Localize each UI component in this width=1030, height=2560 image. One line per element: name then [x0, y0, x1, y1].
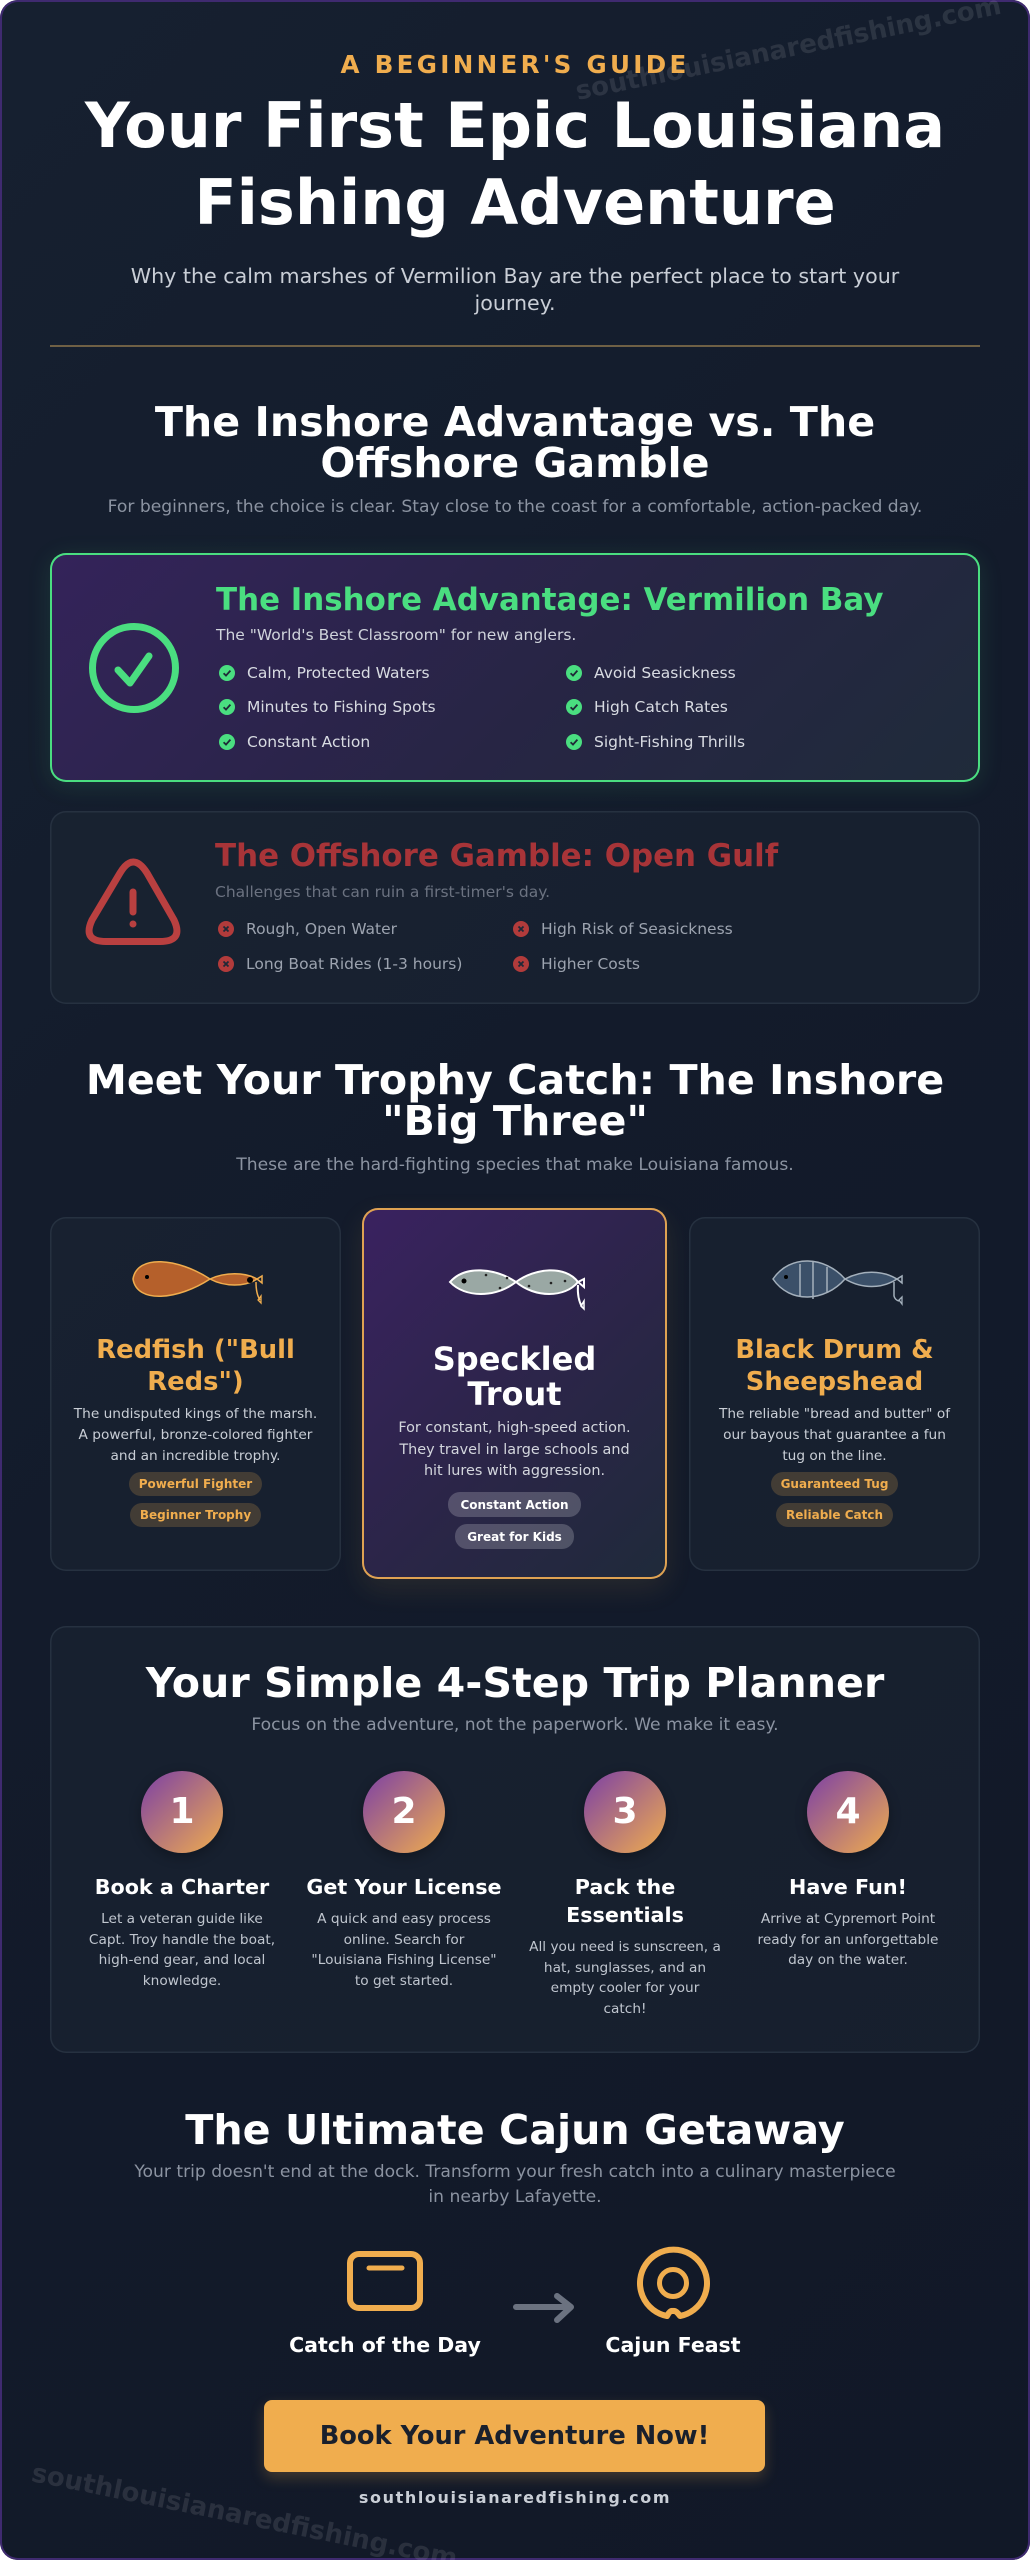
- tag: [771, 1472, 898, 1496]
- step text: empty cooler for your: [551, 1980, 699, 1996]
- description: They travel in large schools and: [399, 1442, 630, 1458]
- header: [50, 50, 980, 347]
- panel: offshore gamble: [50, 811, 980, 1004]
- tag: [448, 1492, 581, 1517]
- number badge: [363, 1771, 445, 1853]
- number badge: 4: [835, 1791, 861, 1832]
- step 1: [89, 1771, 275, 1989]
- heading: Meet Your Trophy Catch: The Inshore: [86, 1056, 944, 1104]
- icon: warning triangle: [86, 858, 180, 945]
- step text: [89, 1911, 275, 1989]
- subtitle: [131, 264, 900, 315]
- step text: Arrive at Cypremort Point: [761, 1911, 935, 1927]
- name: [96, 1335, 295, 1397]
- website: southlouisianaredfishing.com: [359, 2488, 671, 2507]
- description: hit lures with aggression.: [424, 1463, 605, 1479]
- section heading: big three: [86, 1056, 944, 1175]
- number badge: [807, 1771, 889, 1853]
- card: speckled trout (featured): [362, 1208, 667, 1579]
- tag: Beginner Trophy: [140, 1508, 251, 1522]
- step title: Pack the: [575, 1875, 675, 1899]
- heading: Offshore Gamble: [320, 439, 710, 487]
- icon: plate: [635, 2244, 711, 2320]
- icon: speckled trout: [448, 1269, 585, 1311]
- card: redfish: [50, 1217, 341, 1571]
- step text: A quick and easy process: [317, 1911, 491, 1927]
- step title: [566, 1875, 684, 1927]
- step text: All you need is sunscreen, a: [529, 1939, 721, 1955]
- intro text: Focus on the adventure, not the paperwork. We make it easy.: [251, 1715, 779, 1735]
- step text: day on the water.: [788, 1952, 908, 1968]
- step text: online. Search for: [344, 1932, 464, 1948]
- intro text: For beginners, the choice is clear. Stay close to the coast for a comfortable, action-packed day.: [108, 497, 922, 517]
- name: Trout: [467, 1375, 562, 1413]
- step text: [311, 1911, 497, 1989]
- divider rule: [50, 345, 980, 347]
- step title: Have Fun!: [789, 1875, 907, 1899]
- heading: "Big Three": [382, 1097, 648, 1145]
- name: Redfish ("Bull: [96, 1335, 295, 1365]
- number badge: 2: [391, 1791, 417, 1832]
- arrow: [512, 2292, 576, 2322]
- description: tug on the line.: [782, 1448, 887, 1464]
- description: The undisputed kings of the marsh.: [74, 1406, 317, 1422]
- number badge: [141, 1771, 223, 1853]
- description: our bayous that guarantee a fun: [723, 1427, 946, 1443]
- call to action button: [264, 2400, 765, 2472]
- step 4: [758, 1771, 938, 1968]
- section: cajun getaway: [0, 2090, 1030, 2370]
- tag: Constant Action: [460, 1498, 569, 1512]
- number badge: [584, 1771, 666, 1853]
- tag: Guaranteed Tug: [781, 1477, 888, 1491]
- icon: redfish: [132, 1261, 263, 1304]
- tag: [130, 1503, 261, 1527]
- step text: Capt. Troy handle the boat,: [89, 1932, 275, 1948]
- step title: Book a Charter: [95, 1875, 269, 1899]
- title: [84, 89, 945, 239]
- benefit item: High Catch Rates: [594, 698, 728, 716]
- intro text: [0, 2160, 1030, 2210]
- tags: [129, 1472, 262, 1527]
- step 2: [306, 1771, 502, 1989]
- benefit item: Sight-Fishing Thrills: [594, 733, 745, 751]
- icon: catch box: [344, 2248, 426, 2314]
- heading: [86, 1056, 944, 1145]
- subtitle: Why the calm marshes of Vermilion Bay are the perfect place to start your: [131, 264, 899, 288]
- step text: to get started.: [355, 1973, 453, 1989]
- subtitle: journey.: [474, 291, 556, 315]
- step text: ready for an unforgettable: [758, 1932, 938, 1948]
- tag: Great for Kids: [467, 1530, 562, 1544]
- tags: [771, 1472, 898, 1527]
- step text: hat, sunglasses, and an: [544, 1960, 706, 1976]
- card: black drum: [689, 1217, 980, 1571]
- heading: The Inshore Advantage: Vermilion Bay: [216, 582, 883, 618]
- benefit item: Minutes to Fishing Spots: [247, 698, 436, 716]
- description: [718, 1406, 950, 1464]
- drawback item: Rough, Open Water: [246, 920, 397, 938]
- name: Sheepshead: [746, 1367, 923, 1397]
- drawback item: High Risk of Seasickness: [541, 920, 733, 938]
- name: [735, 1335, 934, 1397]
- name: Reds"): [147, 1367, 244, 1397]
- heading: The Ultimate Cajun Getaway: [185, 2106, 845, 2154]
- icon: check circle: [89, 623, 179, 713]
- label: Cajun Feast: [605, 2333, 741, 2357]
- benefit item: Calm, Protected Waters: [247, 664, 430, 682]
- heading: The Inshore Advantage vs. The: [155, 398, 875, 446]
- title: Fishing Adventure: [194, 166, 836, 239]
- drawback item: Higher Costs: [541, 955, 640, 973]
- label: Catch of the Day: [289, 2333, 481, 2357]
- tag: Reliable Catch: [786, 1508, 883, 1522]
- heading: [155, 398, 875, 487]
- step text: knowledge.: [143, 1973, 221, 1989]
- description: For constant, high-speed action.: [398, 1420, 631, 1436]
- tag: [129, 1472, 262, 1496]
- step title: Essentials: [566, 1903, 684, 1927]
- name: [433, 1340, 596, 1413]
- description: The reliable "bread and butter" of: [719, 1406, 950, 1422]
- description: [398, 1420, 631, 1479]
- tags: [448, 1492, 581, 1549]
- name: Black Drum &: [735, 1335, 934, 1365]
- number badge: 1: [169, 1791, 195, 1832]
- step 3: [529, 1771, 721, 2017]
- tag: Powerful Fighter: [139, 1477, 252, 1491]
- eyebrow: A BEGINNER'S GUIDE: [340, 50, 690, 79]
- step text: [758, 1911, 938, 1968]
- step text: high-end gear, and local: [99, 1952, 265, 1968]
- call to action button: Book Your Adventure Now!: [320, 2421, 709, 2451]
- description: A powerful, bronze-colored fighter: [79, 1427, 312, 1443]
- intro text: Your trip doesn't end at the dock. Transform your fresh catch into a culinary masterpiece: [134, 2162, 896, 2182]
- intro text: These are the hard-fighting species that make Louisiana famous.: [236, 1155, 794, 1175]
- description: [74, 1406, 317, 1464]
- icon: black drum: [772, 1260, 903, 1306]
- drawback item: Long Boat Rides (1-3 hours): [246, 955, 462, 973]
- step text: catch!: [604, 2001, 646, 2017]
- description: The "World's Best Classroom" for new anglers.: [216, 626, 576, 644]
- heading: The Offshore Gamble: Open Gulf: [215, 838, 778, 874]
- step text: [529, 1939, 721, 2017]
- benefit item: Constant Action: [247, 733, 370, 751]
- title: Your First Epic Louisiana: [85, 89, 945, 162]
- heading: Your Simple 4-Step Trip Planner: [146, 1659, 884, 1707]
- panel: trip planner: [50, 1626, 980, 2053]
- panel: inshore advantage: [50, 553, 980, 782]
- name: Speckled: [433, 1340, 596, 1378]
- description: Challenges that can ruin a first-timer's day.: [215, 883, 550, 901]
- step text: "Louisiana Fishing License": [311, 1952, 497, 1968]
- section heading: inshore vs offshore: [108, 398, 922, 517]
- description: and an incredible trophy.: [111, 1448, 280, 1464]
- step text: Let a veteran guide like: [101, 1911, 263, 1927]
- benefit item: Avoid Seasickness: [594, 664, 736, 682]
- step title: Get Your License: [306, 1875, 502, 1899]
- intro text: in nearby Lafayette.: [428, 2187, 602, 2207]
- tag: [455, 1524, 574, 1549]
- number badge: 3: [612, 1791, 638, 1832]
- tag: [776, 1503, 893, 1527]
